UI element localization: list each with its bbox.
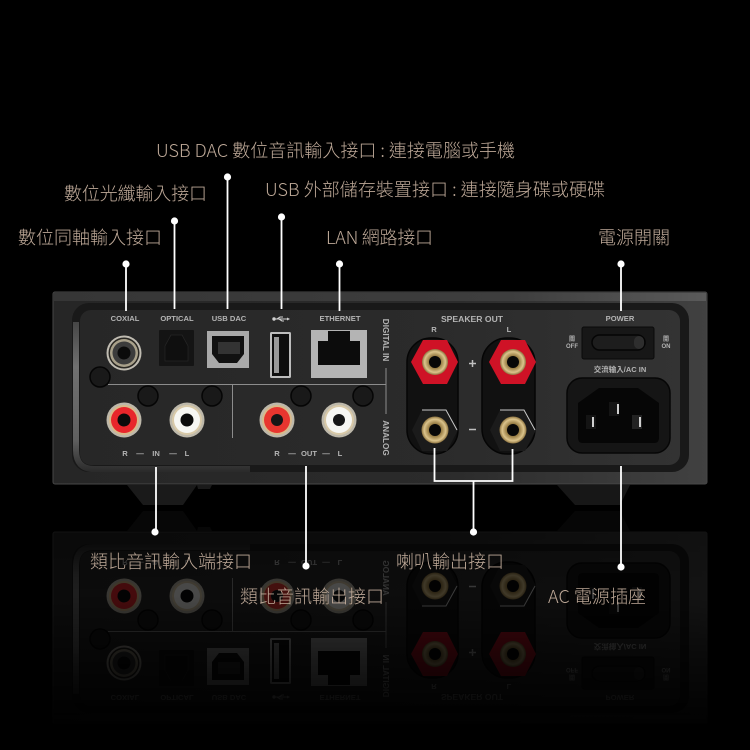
port labels: OFF [566, 344, 578, 350]
speaker terminal r minus [412, 410, 458, 451]
left foot [127, 485, 212, 505]
port labels: IN [152, 449, 160, 458]
port labels: ANALOG [381, 420, 390, 456]
left bevel highlight [76, 322, 250, 469]
label: coaxial: 數位同軸輸入接口 [18, 224, 162, 250]
port labels [111, 314, 670, 458]
port labels: ETHERNET [320, 314, 361, 323]
port labels: OPTICAL [160, 314, 194, 323]
port labels: — [169, 449, 177, 458]
line: usb storage [280, 217, 282, 309]
power switch [582, 327, 654, 359]
port labels: — [136, 449, 144, 458]
line: speaker bracket [434, 448, 512, 532]
inner panel [80, 310, 680, 465]
rca white out [322, 402, 356, 438]
port labels: 交流输入/AC IN [594, 364, 646, 374]
recess [72, 303, 689, 472]
speaker terminal l minus [490, 410, 536, 451]
line: ac socket [620, 466, 622, 567]
speaker terminal plates [407, 338, 535, 454]
line: analog out [305, 466, 307, 566]
port labels: SPEAKER OUT [441, 314, 504, 324]
port labels: — [322, 449, 330, 458]
line: usb dac [226, 177, 228, 309]
ac socket [567, 378, 670, 453]
top edge highlight [54, 293, 706, 301]
line: coaxial [125, 264, 127, 311]
port labels: R [274, 449, 280, 458]
rca white in [170, 402, 204, 438]
rca red out [260, 402, 294, 438]
port labels: R [122, 449, 128, 458]
label: power switch: 電源開關 [598, 224, 670, 250]
ethernet port [311, 330, 367, 378]
usb b port [207, 331, 249, 368]
speaker terminal r plus [411, 340, 458, 384]
label: analog in: 類比音訊輸入端接口 [90, 548, 252, 574]
optical port [159, 330, 194, 366]
port labels: L [338, 449, 343, 458]
label: analog out: 類比音訊輸出接口 [240, 583, 384, 609]
port labels: USB DAC [212, 314, 247, 323]
icon: usb symbol [272, 317, 290, 321]
amplifier rear panel [53, 292, 707, 505]
label: usb storage: USB 外部儲存裝置接口 : 連接隨身碟或硬碟 [265, 176, 605, 202]
port labels: L [507, 325, 512, 334]
speaker terminal l plus [489, 340, 536, 384]
label: optical: 數位光纖輸入接口 [64, 180, 207, 206]
port labels: COXIAL [111, 314, 140, 323]
port labels: R [431, 325, 437, 334]
line: ethernet [338, 264, 340, 311]
chassis [53, 292, 707, 484]
port labels: POWER [606, 314, 635, 323]
line: analog in [155, 467, 157, 532]
port labels: ON [662, 344, 670, 350]
port labels: DIGITAL IN [381, 319, 390, 361]
label: lan: LAN 網路接口 [326, 224, 433, 250]
callout dots [122, 173, 625, 571]
right foot [525, 485, 630, 505]
port labels: L [185, 449, 190, 458]
rubber caps [90, 367, 373, 406]
polarity marks [469, 360, 476, 430]
line: optical [174, 221, 176, 309]
floor reflection [52, 532, 708, 700]
usb a port [270, 332, 291, 378]
port labels: OUT [301, 449, 317, 458]
label: usb dac: USB DAC 數位音訊輸入接口 : 連接電腦或手機 [156, 137, 515, 163]
label: speaker out: 喇叭輸出接口 [396, 548, 504, 574]
port labels: — [288, 449, 296, 458]
callout lines [126, 177, 621, 567]
divider lines [108, 368, 386, 438]
rca red in [106, 402, 142, 438]
coaxial port [106, 336, 142, 370]
port labels: 關 [569, 336, 575, 343]
label: ac socket: AC 電源插座 [548, 583, 646, 609]
port labels: 開 [663, 336, 669, 343]
line: power [620, 264, 622, 311]
